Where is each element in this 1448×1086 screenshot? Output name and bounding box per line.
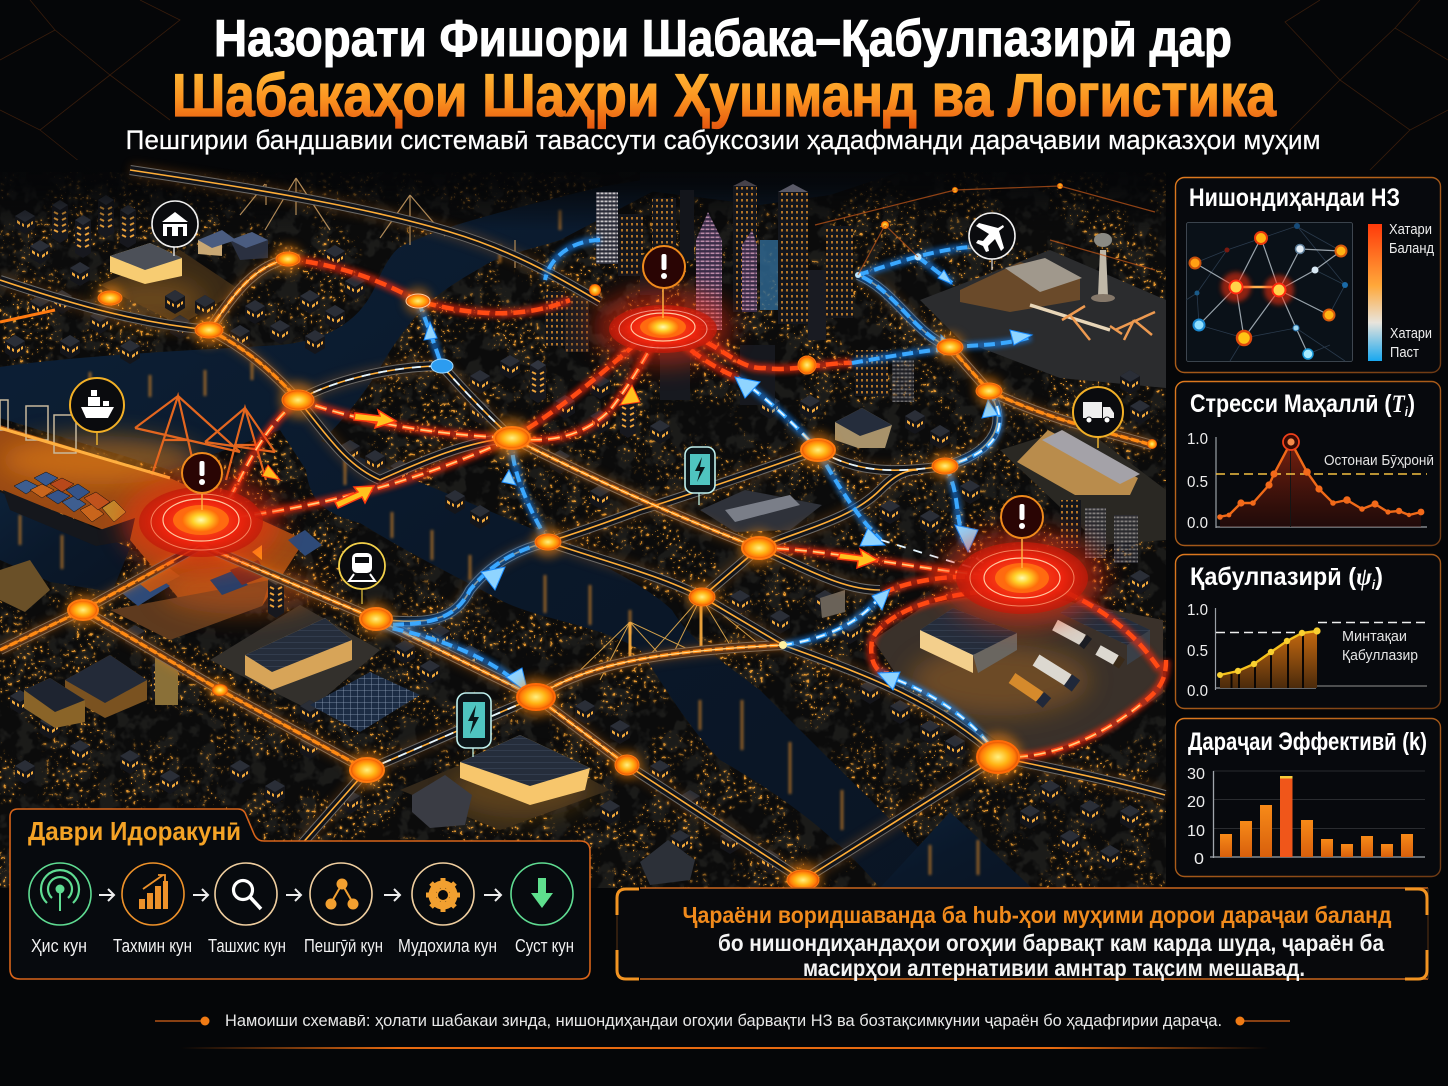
area chart: Минтақаи — [1342, 628, 1407, 645]
icon: charging phone lower — [457, 693, 491, 757]
risk scale: Паст — [1390, 344, 1419, 361]
step: estimate — [113, 863, 192, 956]
arrow — [286, 889, 301, 901]
footnote: Намоиши схемавӣ: ҳолати шабакаи зинда, нишондиҳандаи огоҳии барвақти НЗ ва бозтақсимкунии ҷараён бо ҳадафгирии дараҷа. — [225, 1011, 1222, 1030]
area chart: Қабуллазир — [1342, 647, 1418, 664]
subtitle: Пешгирии бандшавии системавӣ тавассути сабуксозии ҳадафманди дараҷавии марказҳои муҳим — [126, 125, 1320, 155]
logistics lots — [0, 250, 1166, 830]
warm light pools — [0, 278, 1090, 818]
arrow — [484, 889, 501, 901]
warehouses and buildings — [0, 230, 1150, 885]
step: sense: Ҳис кун — [31, 936, 87, 956]
panel heading: Стресси Маҳаллӣ (T — [1190, 390, 1425, 418]
bar chart: 20 — [1187, 794, 1205, 811]
step: intervene — [398, 863, 497, 956]
risk scale: Баланд — [1389, 240, 1434, 257]
airport perimeter lines — [815, 186, 1155, 275]
title line 2: Шабакаҳои Шаҳри Ҳушманд ва Логистика — [172, 62, 1277, 129]
route arrows — [252, 270, 1032, 693]
icon: ship — [70, 378, 124, 445]
node glows — [67, 245, 1022, 898]
bar chart: 10 — [1187, 823, 1205, 840]
panel: effective degree — [1176, 718, 1440, 876]
alert pin: logistics — [1001, 496, 1043, 538]
icon: plane — [969, 213, 1015, 270]
title — [126, 10, 1320, 155]
decorative network corners — [0, 0, 1448, 170]
hub: port — [121, 474, 281, 570]
step: throttle: Суст кун — [515, 936, 574, 956]
arrow — [384, 889, 400, 901]
bar chart: 0 — [1194, 851, 1204, 868]
risk scale — [1368, 221, 1434, 361]
arrow — [99, 889, 114, 901]
port cranes — [135, 396, 275, 480]
line chart: 0.0 — [1187, 515, 1208, 532]
step: estimate: Тахмин кун — [113, 936, 192, 956]
bridge cables — [570, 597, 760, 680]
risk scale: Хатари — [1390, 325, 1432, 342]
alert pin: downtown — [643, 246, 685, 288]
hub: downtown — [593, 288, 733, 365]
river — [0, 172, 1032, 888]
night city texture — [0, 172, 1166, 888]
panel heading: Қабулпазирӣ (ψ — [1190, 563, 1373, 591]
area chart: 1.0 — [1187, 602, 1208, 619]
callout: масирҳои алтернативии амнтар тақсим мешавад. — [803, 955, 1305, 981]
container ship — [3, 472, 135, 546]
step: intervene: Мудохила кун — [398, 936, 497, 956]
bar chart — [1187, 766, 1425, 868]
top bridge towers — [240, 178, 515, 268]
step: predict — [304, 863, 383, 956]
icon: truck — [1073, 387, 1123, 448]
line chart: 1.0 — [1187, 431, 1208, 448]
panel: early warning network — [1176, 178, 1440, 372]
panel heading: Даври Идоракунӣ — [28, 816, 241, 846]
icon: train — [339, 543, 385, 604]
step: predict: Пешгӯӣ кун — [304, 936, 383, 956]
area chart: 0.5 — [1187, 643, 1208, 660]
red congestion routes — [0, 259, 1166, 757]
hub: logistics — [940, 530, 1104, 626]
icon: charging phone upper — [685, 447, 715, 505]
panel: management cycle — [10, 809, 590, 979]
step: throttle — [511, 863, 574, 956]
residential blocks — [5, 195, 1150, 874]
panel: local stress — [1176, 382, 1440, 546]
risk scale: Хатари — [1389, 221, 1432, 238]
blue relief routes — [298, 240, 1031, 770]
panel heading: i — [1405, 404, 1408, 419]
step: diagnose: Ташхис кун — [208, 936, 286, 956]
line chart: 0.5 — [1187, 474, 1208, 491]
bar chart: 30 — [1187, 766, 1205, 783]
trucks — [1012, 625, 1122, 703]
alert pin: port — [182, 453, 222, 493]
stacked containers — [118, 530, 322, 606]
top fade — [0, 160, 1170, 230]
arrow — [193, 889, 208, 901]
road network — [0, 170, 1165, 880]
panel heading: Нишондиҳандаи НЗ — [1189, 184, 1400, 212]
area chart: 0.0 — [1187, 683, 1208, 700]
callout body: бо нишондиҳандаҳои огоҳии барвақт кам карда шуда, ҷараён ба — [718, 930, 1384, 956]
step: sense — [29, 863, 91, 956]
line chart: Остонаи Бӯҳронӣ — [1324, 453, 1434, 469]
title line 1: Назорати Фишори Шабака–Қабулпазирӣ дар — [214, 10, 1232, 68]
callout headline: Ҷараёни воридшаванда ба hub-ҳои муҳими дорои дараҷаи баланд — [682, 902, 1392, 928]
network graph — [1186, 222, 1352, 362]
footer line — [180, 1047, 1270, 1049]
step: diagnose — [208, 863, 286, 956]
panel: acceptance — [1176, 554, 1440, 708]
icon: warehouse — [152, 201, 198, 256]
downtown skyscrapers — [545, 180, 1138, 563]
callout — [617, 888, 1428, 981]
panel heading: ) — [1408, 390, 1415, 418]
city map — [0, 160, 1170, 898]
panel heading: ) — [1375, 563, 1383, 591]
area chart — [1187, 602, 1428, 700]
network nodes — [67, 183, 1157, 898]
quay gantries — [0, 400, 170, 478]
line chart — [1187, 431, 1434, 532]
airport tower and planes — [1030, 233, 1155, 340]
panel heading: i — [1372, 577, 1376, 592]
map ground — [0, 172, 1166, 888]
